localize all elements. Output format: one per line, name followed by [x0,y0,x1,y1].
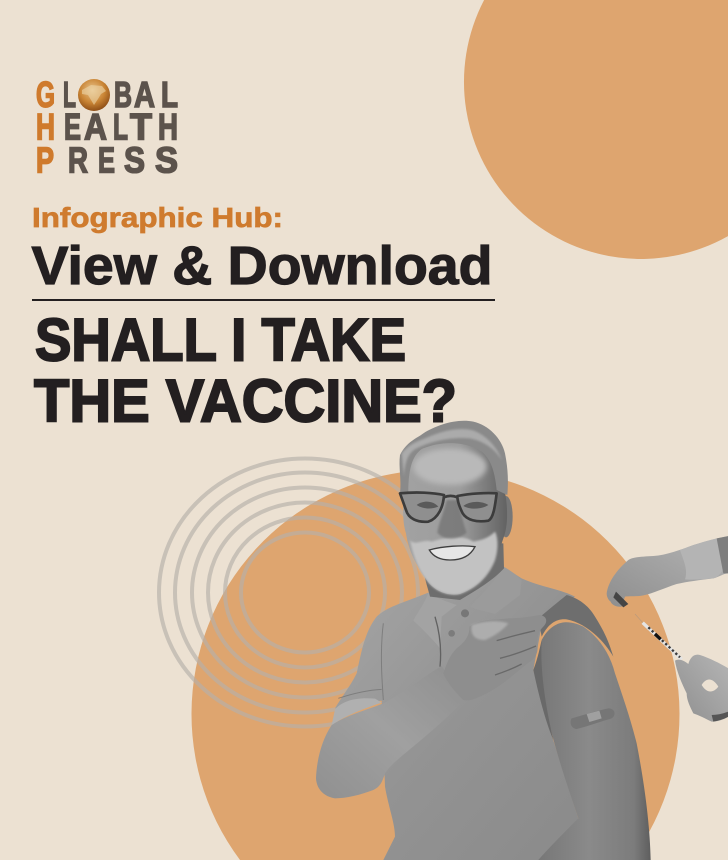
neck [423,543,504,600]
logo text: Health: H [158,106,178,148]
logo text: Global: B [114,74,132,115]
logo text: Press [36,140,178,180]
subheading: Infographic Hub: Infographic Hub: [32,202,283,233]
heading: View & Download: View & Download [32,236,493,296]
shirt body [335,567,587,860]
icon: globe [78,79,110,111]
logo text: Global: A [134,74,155,115]
logo text: Global: G [36,74,55,115]
gloved hand holding syringe cap [607,536,728,607]
logo text: Press: S [124,140,145,180]
decorative circle: top right [464,0,728,259]
logo text: Global: O [84,74,104,115]
photo: man showing bandaged arm [316,421,728,860]
sleeve fold [538,595,613,657]
hand on sleeve [443,615,546,700]
ear [499,496,513,537]
sleeve cuff skin [332,698,382,725]
forehead highlight [413,448,487,485]
logo text: Press: E [98,140,115,180]
bandage [571,708,615,729]
title: Shall I take the vaccine: SHALL I TAKE [35,306,406,374]
logo text: Press: R [68,140,88,180]
nose [437,500,467,539]
decorative circle: behind man [192,470,680,860]
face [403,442,507,595]
beard [410,532,497,595]
gloved hand holding syringe [675,655,728,722]
forearm [316,666,465,798]
shirt collar [338,567,522,700]
logo text: Health: L [113,106,128,148]
logo text: Health: A [84,106,107,148]
title: Shall I take the vaccine [34,306,457,434]
logo: Global Health Press [36,74,178,180]
upper arm [533,595,651,860]
concentric rings [159,458,451,726]
logo text: Health: H [36,106,55,148]
hair [400,421,508,495]
glasses [400,493,497,522]
mouth [429,546,475,560]
logo text: Health [36,106,178,148]
logo text: Health: E [64,106,81,148]
title: Shall I take the vaccine: THE VACCINE? [34,368,457,434]
divider line [32,299,495,301]
head [400,421,513,595]
eyes [417,502,488,509]
logo text: Global [36,74,178,115]
logo text: Global: L [63,74,76,115]
logo text: Press: P [36,140,54,180]
syringe [635,614,682,659]
logo text: Press: S [155,140,178,180]
logo text: Health: T [130,106,152,148]
logo text: Global: L [161,74,178,115]
